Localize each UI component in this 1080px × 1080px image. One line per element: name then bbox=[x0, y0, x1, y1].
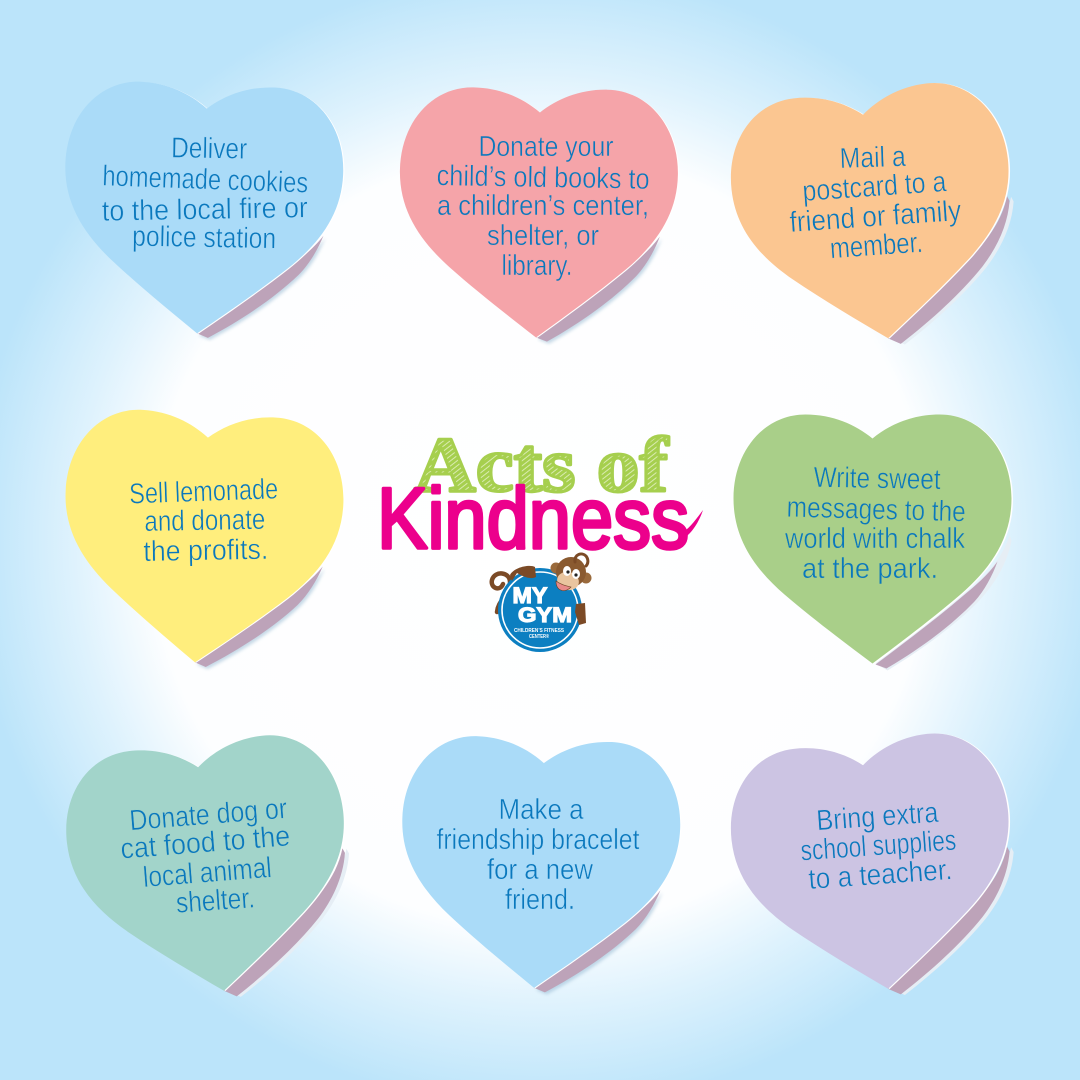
logo text: MY bbox=[512, 583, 548, 608]
text: school supplies: school supplies bbox=[799, 825, 957, 867]
text: deliver cookies: Deliver bbox=[171, 132, 248, 166]
text: sell lemonade bbox=[129, 473, 279, 568]
text: school supplies bbox=[799, 797, 957, 896]
heart shape pink bbox=[397, 86, 681, 346]
text: friendship bracelet bbox=[436, 794, 640, 916]
text: sell lemonade: the profits. bbox=[143, 534, 269, 568]
text: mail postcard: Mail a bbox=[839, 141, 907, 175]
title: Kindness: Kindness bbox=[377, 471, 689, 567]
panel: heart donate books bbox=[397, 86, 681, 346]
text: deliver cookies: to the local fire or bbox=[102, 192, 308, 228]
text: deliver cookies bbox=[102, 132, 309, 255]
logo circle bbox=[498, 568, 582, 652]
panel: heart write messages bbox=[734, 414, 1013, 670]
logo: My Gym: GYM bbox=[518, 604, 572, 627]
text: donate books bbox=[436, 131, 650, 282]
heart shape blue bbox=[395, 733, 685, 1000]
text: donate books: shelter, or bbox=[487, 220, 599, 252]
text: write messages: world with chalk bbox=[784, 523, 965, 555]
text: mail postcard bbox=[788, 141, 963, 265]
text: friendship bracelet: for a new bbox=[487, 854, 594, 886]
heart shape teal bbox=[57, 727, 364, 1015]
text: friendship bracelet: friend. bbox=[505, 884, 575, 916]
text: school supplies: Bring extra bbox=[815, 797, 940, 837]
panel: heart mail postcard bbox=[722, 75, 1029, 362]
text: donate pet food: Donate dog or bbox=[128, 793, 289, 837]
text: sell lemonade: Sell lemonade bbox=[129, 473, 279, 511]
text: mail postcard: member. bbox=[829, 227, 924, 265]
panel: heart donate pet food bbox=[57, 727, 364, 1015]
panel: heart friendship bracelet bbox=[395, 733, 685, 1000]
panel: heart school supplies bbox=[722, 726, 1029, 1012]
monkey bbox=[510, 554, 592, 625]
text: donate books: a children’s center, bbox=[437, 190, 649, 222]
panel: heart sell lemonade bbox=[56, 406, 349, 676]
heart shape yellow bbox=[56, 406, 349, 676]
text: donate pet food: cat food to the bbox=[119, 820, 291, 866]
heart shape lavender bbox=[722, 726, 1029, 1012]
text: donate books: library. bbox=[502, 250, 572, 282]
logo: My Gym: CENTER® bbox=[529, 633, 549, 640]
text: mail postcard: friend or family bbox=[788, 195, 963, 239]
logo: My Gym bbox=[492, 554, 592, 652]
text: donate books: Donate your bbox=[478, 131, 614, 163]
text: mail postcard: postcard to a bbox=[801, 166, 948, 208]
heart shape blue bbox=[58, 79, 348, 346]
text: write messages: Write sweet bbox=[813, 462, 941, 496]
text: friendship bracelet: friendship bracelet bbox=[436, 824, 640, 856]
logo: My Gym: CHILDREN’S FITNESS bbox=[514, 628, 564, 634]
heart shape green bbox=[734, 414, 1013, 670]
text: donate pet food: local animal bbox=[142, 852, 273, 894]
text: deliver cookies: police station bbox=[132, 221, 276, 255]
text: deliver cookies: homemade cookies bbox=[102, 160, 309, 200]
monkey tail bbox=[492, 573, 510, 612]
heart shape orange bbox=[722, 75, 1029, 362]
text: donate books: child’s old books to bbox=[436, 160, 650, 196]
text: write messages: at the park. bbox=[802, 553, 938, 585]
text: sell lemonade: and donate bbox=[144, 504, 266, 538]
title: Acts of: Acts of bbox=[414, 421, 669, 508]
text: donate pet food bbox=[119, 793, 291, 920]
text: school supplies: to a teacher. bbox=[807, 854, 953, 896]
text: write messages: messages to the bbox=[786, 492, 966, 528]
text: donate pet food: shelter. bbox=[175, 882, 256, 920]
text: friendship bracelet: Make a bbox=[498, 794, 584, 826]
panel: heart deliver cookies bbox=[58, 79, 348, 346]
text: write messages bbox=[784, 462, 966, 585]
